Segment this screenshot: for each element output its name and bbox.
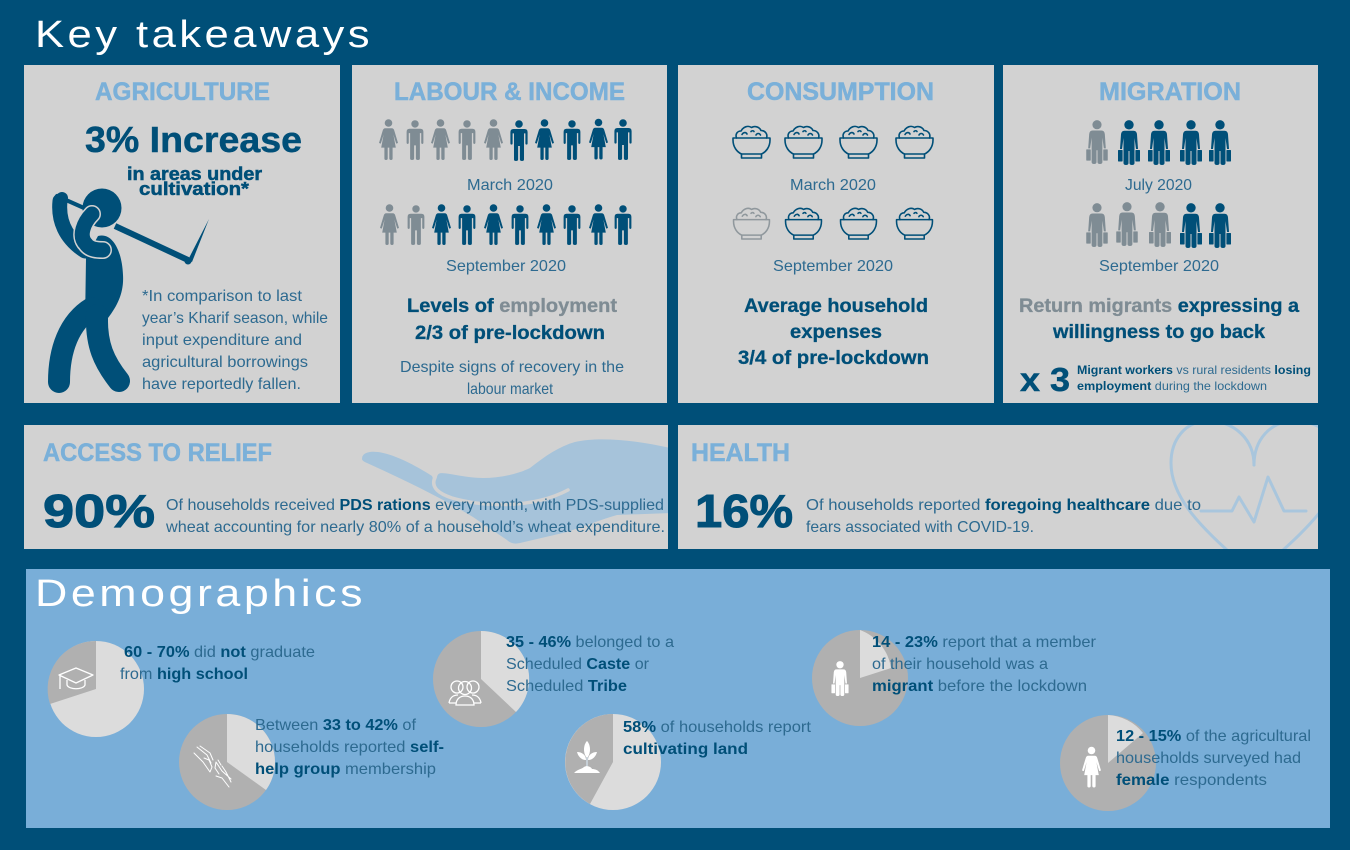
label: September 2020: September 2020 xyxy=(446,258,566,275)
note: recovery in the labour market: labour market xyxy=(467,381,553,398)
text: migrant household member: migrant before the lockdown xyxy=(872,678,1087,695)
heading: demographics: Demographics xyxy=(35,573,366,615)
text: self-help group: Between 33 to 42% of xyxy=(255,717,417,734)
message: return migrants: Return migrants expressing a xyxy=(1019,296,1299,317)
pictogram: bowls September 2020 xyxy=(734,208,932,239)
text: cultivating land xyxy=(623,719,812,758)
message: return migrants xyxy=(1019,296,1299,343)
pie: female respondents xyxy=(1060,715,1156,811)
text: scheduled caste or tribe: 35 - 46% belonged to a xyxy=(506,634,674,651)
text: migrant household member: 14 - 23% report that a member xyxy=(872,634,1097,651)
title: Key takeaways: Key takeaways xyxy=(35,14,373,56)
message: levels of employment: 2/3 of pre-lockdown xyxy=(415,323,605,344)
pie: self-help group xyxy=(179,714,275,810)
panel: demographics xyxy=(26,569,1330,828)
panel: labour and income xyxy=(352,65,667,403)
message: average household expenses: 3/4 of pre-lockdown xyxy=(738,348,929,369)
text: cultivating land: 58% of households report xyxy=(623,719,812,736)
stat: 16%: 16% xyxy=(695,485,793,537)
pie: migrant household member xyxy=(812,630,908,726)
text: self-help group xyxy=(255,717,444,778)
icon: helping hands xyxy=(194,746,231,787)
text: high school: from high school xyxy=(120,666,248,683)
subheading: in areas under cultivation xyxy=(127,164,262,199)
text: self-help group: help group membership xyxy=(255,761,436,778)
footnote text: *In comparison to last xyxy=(142,288,303,305)
footnote text: year’s Kharif season, while xyxy=(142,310,328,327)
pie: high school xyxy=(48,641,144,737)
pictogram: bowls March 2020 xyxy=(733,126,933,158)
note: migrant workers vs rural residents: Migrant workers vs rural residents losing xyxy=(1077,363,1311,377)
text: female respondents: female respondents xyxy=(1116,772,1267,789)
note: migrant workers vs rural residents xyxy=(1077,363,1311,393)
heading: labour and income: LABOUR & INCOME xyxy=(394,78,625,106)
footnote text xyxy=(142,288,328,393)
pictogram: employment March 2020 xyxy=(379,119,632,161)
pictogram: employment September 2020 xyxy=(380,204,631,245)
panel: agriculture xyxy=(24,65,340,403)
pictogram: migrants July 2020 xyxy=(1086,120,1231,165)
note: recovery in the labour market: Despite signs of recovery in the xyxy=(400,359,624,376)
text: PDS rations: Of households received PDS rations every month, with PDS-supplied xyxy=(166,497,664,514)
text: female respondents: households surveyed had xyxy=(1116,750,1301,767)
footnote text: have reportedly fallen. xyxy=(142,376,301,393)
text: cultivating land: cultivating land xyxy=(623,741,748,758)
text: foregoing healthcare: fears associated with COVID-19. xyxy=(806,519,1034,536)
stat: 3% increase: 3% Increase xyxy=(85,119,302,160)
icon: golfer xyxy=(56,188,209,382)
stat: x 3: x 3 xyxy=(1020,361,1070,398)
label: September 2020: September 2020 xyxy=(773,258,893,275)
text: female respondents: 12 - 15% of the agricultural xyxy=(1116,728,1311,745)
icon: open hand xyxy=(362,439,670,544)
pie: scheduled caste or tribe xyxy=(433,631,529,727)
footnote text: input expenditure and xyxy=(142,332,302,349)
message: average household expenses: Average household xyxy=(744,296,928,317)
heading: agriculture: AGRICULTURE xyxy=(95,78,270,106)
panel: migration xyxy=(1003,65,1318,403)
stat: 90%: 90% xyxy=(43,485,155,537)
text: migrant household member: of their household was a xyxy=(872,656,1048,673)
heading: health: HEALTH xyxy=(691,439,790,467)
text: high school xyxy=(120,644,315,683)
heading: access to relief: ACCESS TO RELIEF xyxy=(43,439,272,467)
label: March 2020: March 2020 xyxy=(790,177,876,194)
pictogram: migrants September 2020 xyxy=(1086,202,1231,248)
note: recovery in the labour market xyxy=(400,359,624,398)
message: average household expenses: expenses xyxy=(790,322,882,343)
text: scheduled caste or tribe xyxy=(506,634,674,695)
panel: health xyxy=(678,425,1318,549)
text: migrant household member xyxy=(872,634,1097,695)
text: PDS rations xyxy=(165,497,665,536)
icon: heart with pulse xyxy=(1170,425,1318,549)
text: foregoing healthcare: Of households reported foregoing healthcare due to xyxy=(806,497,1201,514)
panel: consumption xyxy=(678,65,994,403)
panel: access to relief xyxy=(24,425,670,549)
footnote text: agricultural borrowings xyxy=(142,354,308,371)
icon: group of people xyxy=(449,681,481,705)
text: high school: 60 - 70% did not graduate xyxy=(124,644,315,661)
message: levels of employment xyxy=(407,296,618,344)
label: September 2020: September 2020 xyxy=(1099,258,1219,275)
message: levels of employment: Levels of employment xyxy=(407,296,618,317)
icon: migrant figure xyxy=(831,661,849,696)
pie: cultivating land xyxy=(565,714,661,810)
text: scheduled caste or tribe: Scheduled Tribe xyxy=(506,678,627,695)
message: average household expenses xyxy=(738,296,929,369)
subheading: in areas under cultivation: in areas under xyxy=(127,164,262,184)
message: return migrants: willingness to go back xyxy=(1052,322,1265,343)
icon: woman figure xyxy=(1082,747,1101,788)
label: July 2020: July 2020 xyxy=(1125,177,1192,194)
text: scheduled caste or tribe: Scheduled Caste or xyxy=(506,656,650,673)
label: March 2020: March 2020 xyxy=(467,177,553,194)
note: migrant workers vs rural residents: employment during the lockdown xyxy=(1077,379,1267,393)
text: female respondents xyxy=(1116,728,1311,789)
icon: seedling xyxy=(574,741,600,773)
text: self-help group: households reported self- xyxy=(255,739,444,756)
icon: graduation cap xyxy=(59,668,93,689)
heading: migration: MIGRATION xyxy=(1099,78,1241,106)
text: foregoing healthcare xyxy=(806,497,1201,536)
heading: consumption: CONSUMPTION xyxy=(747,78,934,106)
text: PDS rations: wheat accounting for nearly 80% of a household’s wheat expenditure. xyxy=(165,519,665,536)
subheading: in areas under cultivation: cultivation* xyxy=(139,179,249,199)
